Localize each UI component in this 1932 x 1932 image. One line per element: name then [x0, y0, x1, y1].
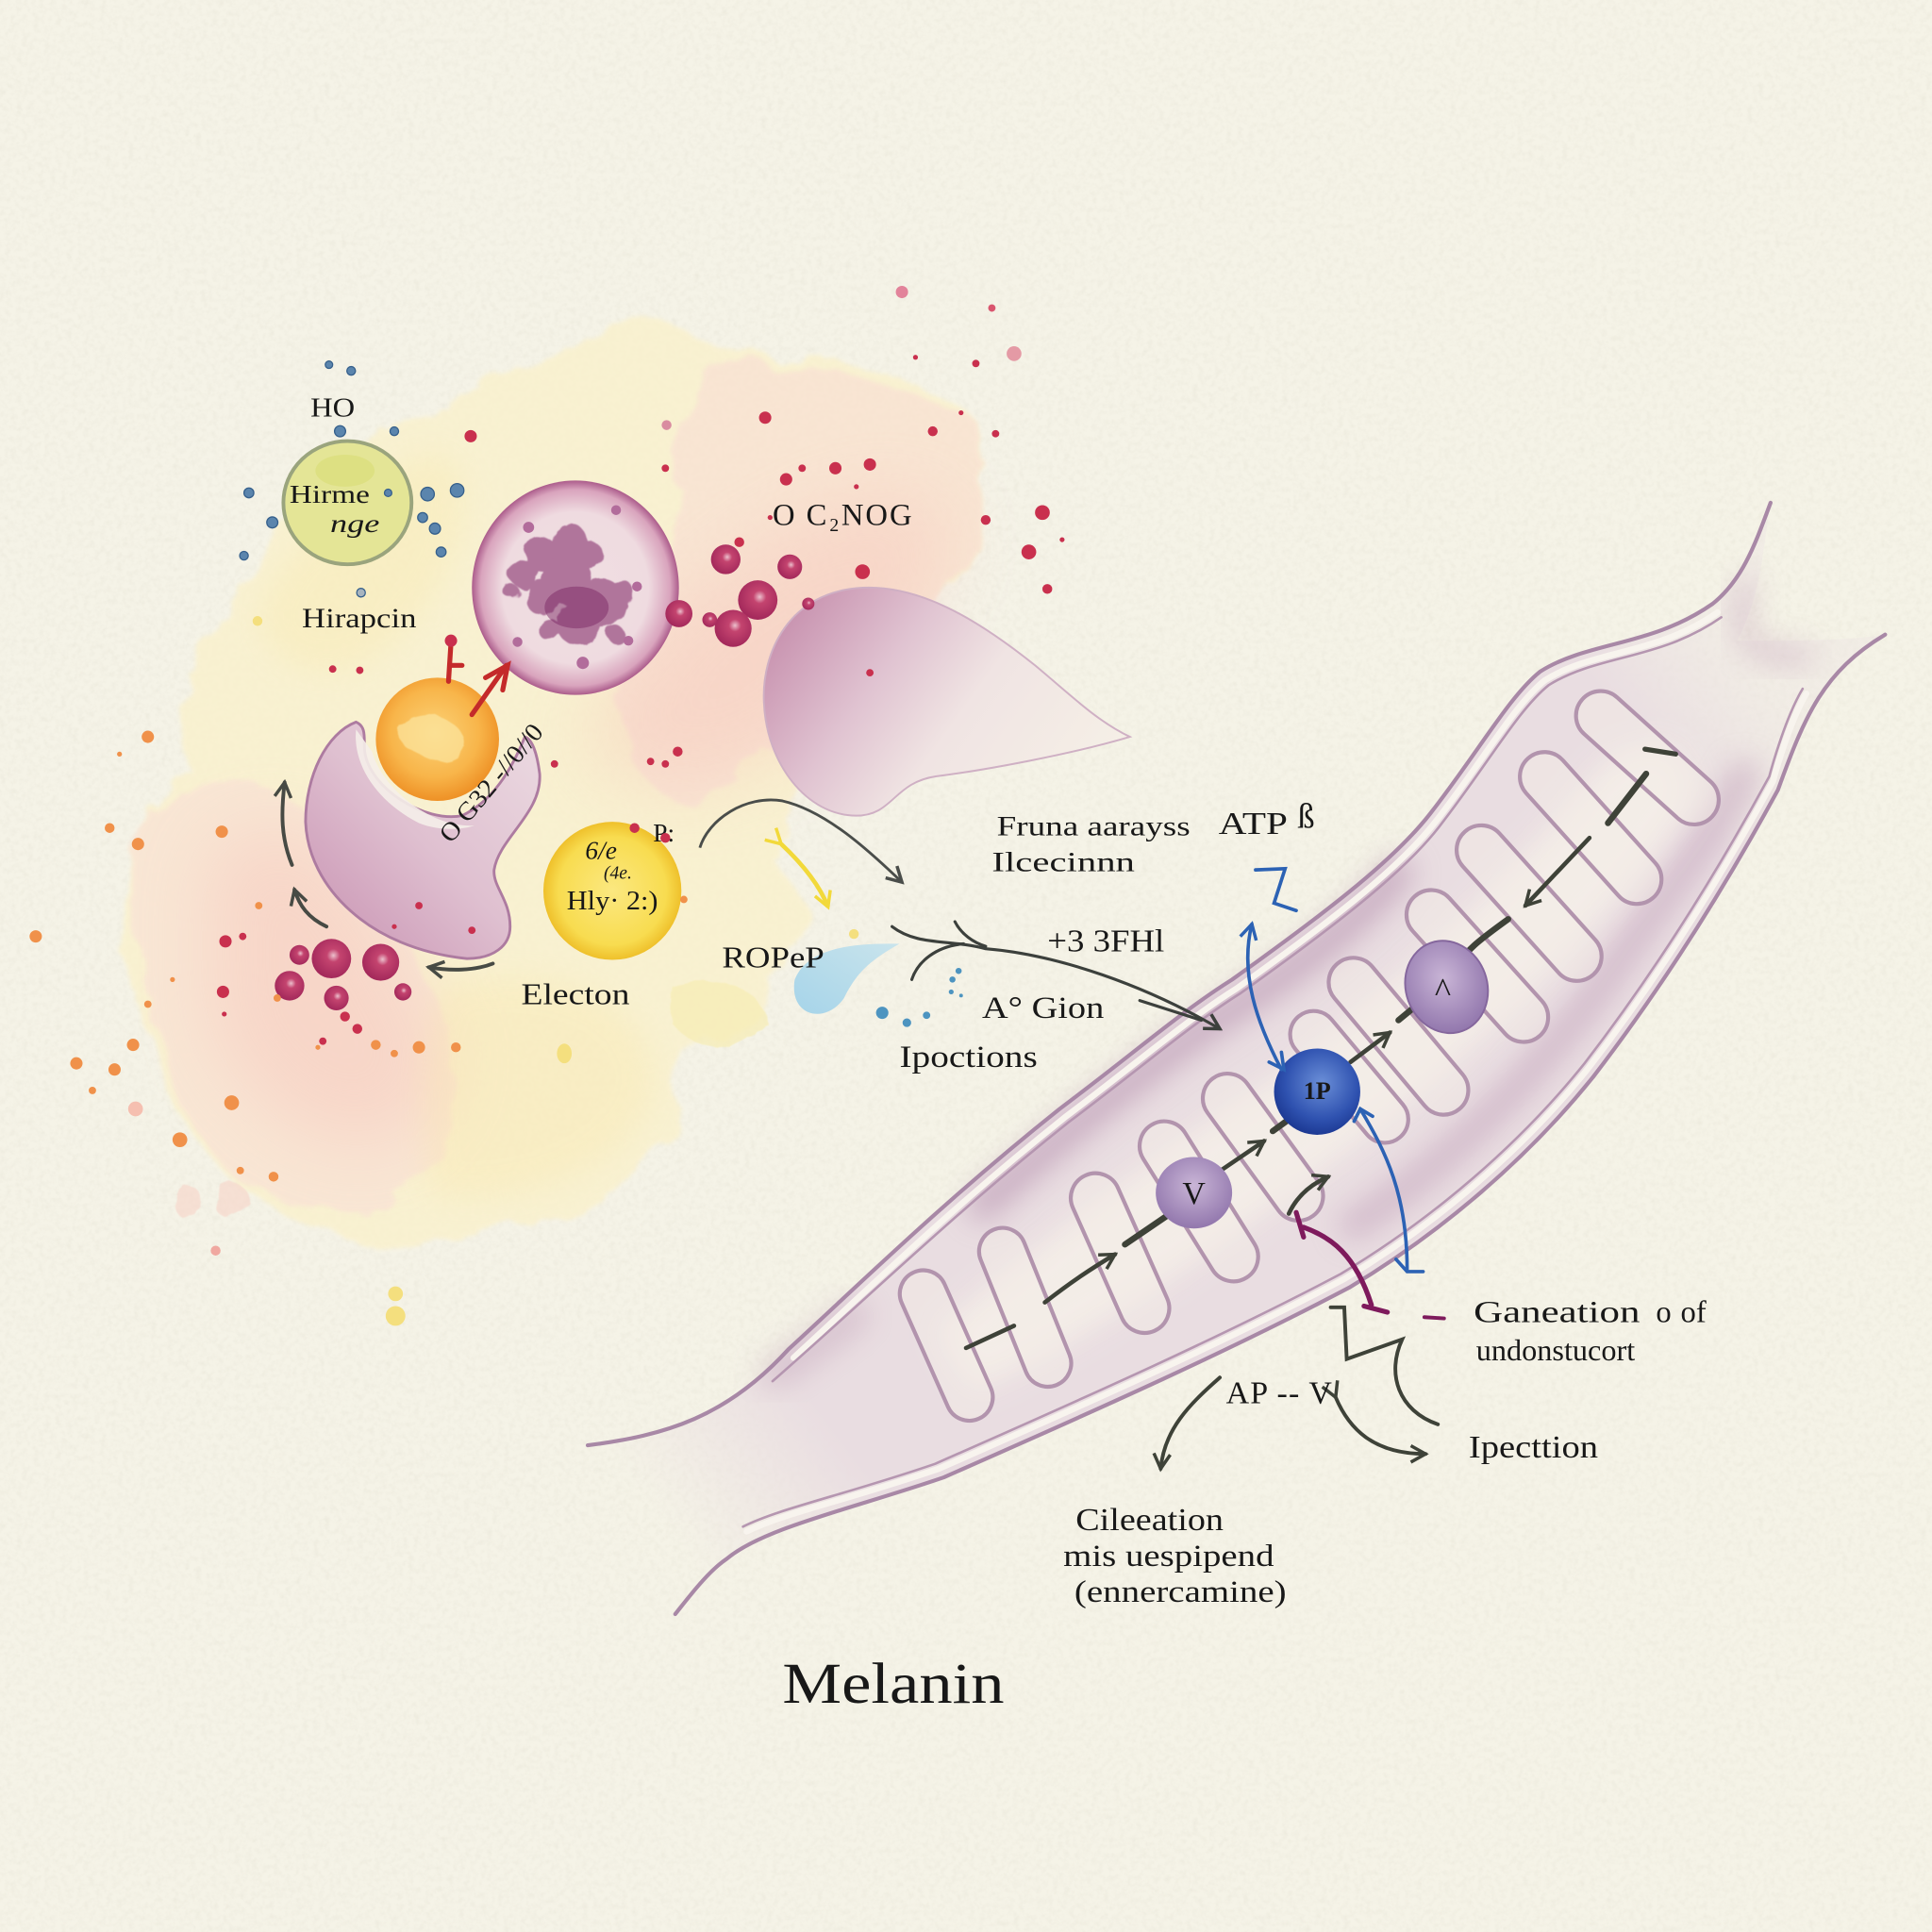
label: AP - V: AP -- V	[1226, 1376, 1332, 1411]
red arrows	[448, 643, 508, 715]
mitochondrion	[588, 503, 1885, 1614]
label: A2 Gion: A° Gion	[982, 991, 1104, 1025]
cell: yellow: 6/e	[585, 836, 617, 864]
zigzag arrow	[1160, 1307, 1438, 1469]
label: mis uespipend: mis uespipend	[1063, 1540, 1274, 1574]
protein complex A	[1392, 929, 1501, 1045]
red spheres chain	[665, 544, 814, 647]
outer membrane	[588, 503, 1885, 1614]
splatter dots	[217, 286, 1064, 1045]
label: +3 3FHl: +3 3FHl	[1047, 924, 1164, 958]
blue arrows	[1248, 869, 1424, 1272]
ATP synthase blue sphere: 1P	[1304, 1077, 1331, 1105]
protein complex V: V	[1182, 1176, 1206, 1211]
label: rotated formula: O G32 -//0//0	[434, 718, 549, 848]
watercolor wash	[128, 317, 991, 1247]
red spheres left	[275, 939, 411, 1010]
label: P: P:	[653, 819, 675, 847]
label: Fruna aarayss: Fruna aarayss	[997, 811, 1191, 842]
cristae	[892, 681, 1729, 1428]
arrow: into mitochondrion	[892, 922, 1220, 1029]
label: Ganeation o of: of	[1681, 1295, 1707, 1329]
small blue dots	[876, 968, 963, 1027]
label: ATP superscript: ß	[1297, 797, 1315, 836]
label: Electon: Electon	[521, 977, 630, 1010]
cell: pink nucleus	[472, 480, 679, 695]
blue droplet shape	[794, 943, 899, 1014]
label: Ganeation o of: o	[1656, 1295, 1672, 1329]
label: OC2NOG: O C₂NOG	[773, 498, 912, 532]
label: Ilcecinnn: Ilcecinnn	[991, 846, 1135, 877]
label: undonstucort: undonstucort	[1476, 1334, 1636, 1367]
arrow: P to mitochondrion	[700, 800, 902, 882]
label: HO: HO	[310, 392, 355, 423]
cell: yellow: Hly· 2:)	[567, 886, 658, 916]
purple arrow	[1296, 1212, 1444, 1319]
orange splatter dots	[29, 731, 688, 1256]
cell: yellow	[543, 822, 681, 959]
kidney shaped organelle	[306, 722, 540, 958]
cell: heme: Hirme	[290, 480, 370, 508]
label: Ipoctions: Ipoctions	[899, 1041, 1038, 1074]
protein complex V	[1156, 1157, 1232, 1228]
label: ROPeP: ROPeP	[722, 941, 824, 974]
label: Cileeation: Cileeation	[1075, 1503, 1224, 1538]
blue droplets	[240, 361, 464, 597]
label: ATP: ATP	[1219, 807, 1288, 841]
title: Melanin: Melanin	[782, 1652, 1004, 1716]
cell: orange	[375, 677, 499, 801]
mitochondrion body	[588, 503, 1885, 1614]
yellow double arrow	[781, 844, 828, 907]
liver shaped organelle	[764, 588, 1130, 816]
ATP synthase blue sphere	[1274, 1049, 1360, 1135]
cell: heme	[283, 441, 411, 564]
cycle arrows	[282, 782, 492, 970]
yellow droplets	[253, 616, 858, 1325]
label: Ganeation o of: Ganeation	[1474, 1295, 1640, 1329]
cell: yellow: (4e.	[604, 863, 632, 883]
protein complex A: ^	[1435, 971, 1451, 1009]
label: Hirapcin: Hirapcin	[302, 603, 416, 634]
cell: heme: nge	[330, 509, 379, 538]
electron chain arrows	[966, 749, 1675, 1348]
label: Ipecttion: Ipecttion	[1469, 1430, 1598, 1465]
label: (ennercamine): (ennercamine)	[1074, 1575, 1287, 1609]
